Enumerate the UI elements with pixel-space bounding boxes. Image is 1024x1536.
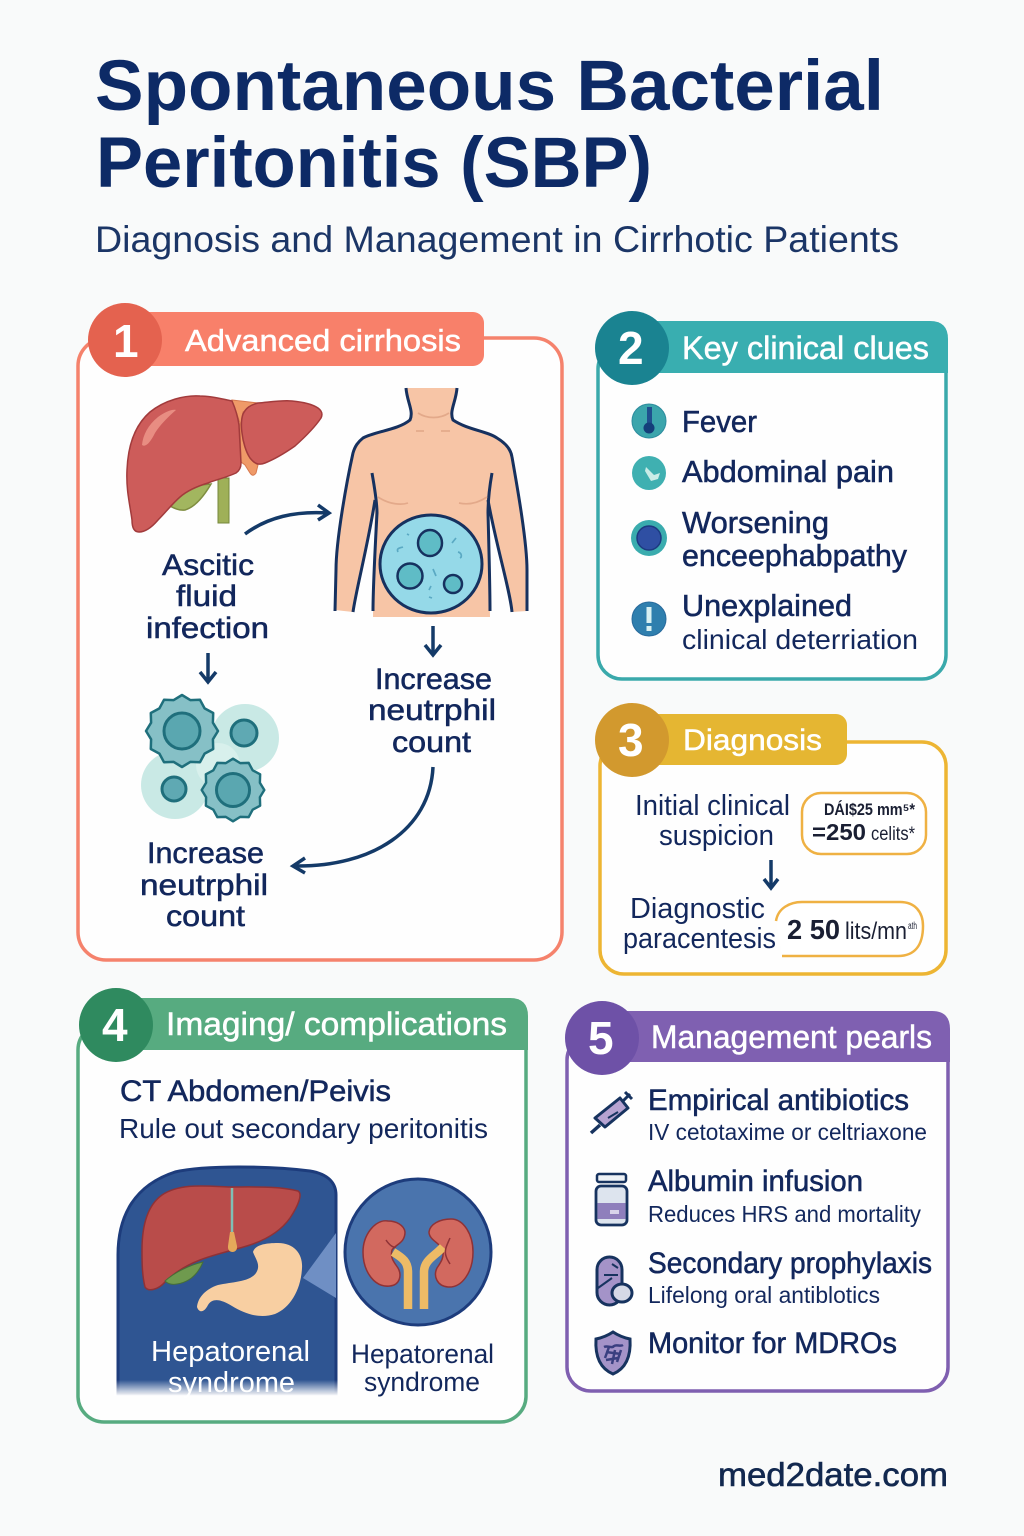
callout: threshold values: celits* — [871, 824, 916, 845]
panel 1: advanced cirrhosis — [78, 303, 562, 960]
label: ascitic fluid infection — [146, 549, 269, 645]
text: CT abdomen — [119, 1075, 488, 1144]
item: monitor for MDROs — [596, 1327, 897, 1374]
illustration: CT scan of abdomen: Hepatorenal — [151, 1336, 310, 1368]
icon: torso with infected ascites — [335, 388, 527, 617]
number badge 3 — [595, 703, 669, 777]
panel 4: imaging and complications — [78, 988, 528, 1422]
callout: threshold values: =250 — [812, 819, 866, 845]
item: empirical antibiotics: Empirical antibiotics — [648, 1084, 909, 1117]
label: increase neutrophil count, left: Increase — [147, 837, 264, 870]
label: increase neutrophil count, right: neutrphil — [368, 694, 496, 727]
text: CT abdomen: Rule out secondary peritonitis — [119, 1113, 488, 1144]
item: fever — [632, 404, 757, 439]
callout: threshold values: DÁI$25 mm⁵* — [824, 800, 915, 819]
item: unexplained deterioration: clinical deterriation — [682, 624, 918, 655]
item: albumin infusion: Albumin infusion — [648, 1165, 863, 1198]
arrow: to paracentesis — [764, 860, 778, 888]
label: increase neutrophil count, left: neutrphil — [140, 869, 268, 902]
item: monitor for MDROs: Monitor for MDROs — [648, 1327, 897, 1360]
header bar 1 — [130, 312, 484, 366]
number badge 5 — [565, 1001, 639, 1075]
arrow: curved return — [293, 767, 433, 873]
panel 5: management pearls — [565, 1001, 950, 1391]
number badge 1 — [88, 303, 162, 377]
illustration: CT scan of abdomen: syndrome — [168, 1367, 295, 1399]
arrow: down to neutrophils — [200, 653, 216, 682]
callout: fluid result — [776, 902, 923, 956]
header text 4: Imaging/ complications — [166, 1006, 507, 1042]
header text 3: Diagnosis — [683, 724, 822, 757]
label: ascitic fluid infection: infection — [146, 612, 269, 645]
callout: threshold values — [802, 793, 926, 854]
number badge 2: 2 — [618, 322, 644, 374]
label: increase neutrophil count, right: Increase — [375, 663, 492, 696]
label: ascitic fluid infection: fluid — [176, 580, 237, 613]
item: secondary prophylaxis: Secondary prophylaxis — [648, 1247, 932, 1280]
item: albumin infusion — [596, 1165, 921, 1227]
item: empirical antibiotics: IV cetotaxime or celtriaxone — [648, 1119, 927, 1145]
icon: liver — [127, 396, 322, 532]
item: unexplained deterioration — [632, 588, 918, 655]
illustration: kidneys — [345, 1179, 491, 1325]
title: Peritonitis (SBP) — [96, 124, 652, 203]
text: initial clinical suspicion: Initial clinical — [635, 790, 790, 822]
item: worsening encephalopathy: enceephabpathy — [682, 538, 907, 573]
header bar 5 — [590, 1011, 950, 1062]
number badge 1: 1 — [113, 315, 139, 367]
number badge 5: 5 — [588, 1012, 614, 1064]
text: diagnostic paracentesis — [623, 893, 776, 955]
number badge 2 — [595, 311, 669, 385]
arrow: abdomen down — [425, 626, 441, 655]
label: increase neutrophil count, left — [140, 837, 268, 933]
header text 5: Management pearls — [651, 1019, 932, 1055]
text: diagnostic paracentesis: paracentesis — [623, 923, 776, 955]
number badge 4 — [79, 988, 153, 1062]
text: initial clinical suspicion: suspicion — [659, 820, 774, 852]
item: unexplained deterioration: Unexplained — [682, 588, 852, 623]
item: albumin infusion: Reduces HRS and mortality — [648, 1201, 921, 1227]
icon: neutrophils — [141, 695, 279, 821]
item: fever: Fever — [682, 404, 757, 439]
subtitle: Diagnosis and Management in Cirrhotic Patients — [95, 219, 899, 260]
title — [95, 47, 884, 203]
number badge 4: 4 — [102, 999, 128, 1051]
number badge 3: 3 — [618, 714, 644, 766]
text: CT abdomen: CT Abdomen/Peivis — [120, 1075, 391, 1108]
item: abdominal pain: Abdominal pain — [682, 454, 894, 489]
label: hepatorenal syndrome: syndrome — [364, 1367, 480, 1397]
text: initial clinical suspicion — [635, 790, 790, 852]
label: increase neutrophil count, left: count — [166, 900, 246, 933]
callout: fluid result: 2 50 — [787, 914, 840, 945]
label: ascitic fluid infection: Ascitic — [162, 549, 254, 582]
label: increase neutrophil count, right — [368, 663, 496, 759]
header bar 4 — [100, 998, 528, 1050]
title: Spontaneous Bacterial — [95, 47, 884, 126]
illustration: CT scan of abdomen — [114, 1167, 340, 1399]
item: secondary prophylaxis: Lifelong oral antiblotics — [648, 1282, 880, 1308]
arrow: liver to abdomen — [245, 505, 329, 534]
header bar 2 — [620, 321, 948, 373]
panel 3: diagnosis — [595, 703, 946, 974]
item: empirical antibiotics — [591, 1084, 927, 1145]
label: hepatorenal syndrome — [351, 1339, 494, 1397]
label: increase neutrophil count, right: count — [392, 726, 472, 759]
header bar 3 — [620, 714, 847, 765]
header text 2: Key clinical clues — [682, 330, 929, 366]
footer: website: med2date.com — [718, 1456, 948, 1493]
item: secondary prophylaxis — [597, 1247, 932, 1308]
callout: fluid result: ath — [908, 921, 917, 932]
callout: fluid result: lits/mn — [845, 918, 907, 945]
item: worsening encephalopathy — [631, 505, 907, 573]
header text 1: Advanced cirrhosis — [185, 323, 461, 358]
item: worsening encephalopathy: Worsening — [682, 505, 829, 540]
panel 2: key clinical clues — [595, 311, 948, 679]
label: hepatorenal syndrome: Hepatorenal — [351, 1339, 494, 1369]
text: diagnostic paracentesis: Diagnostic — [630, 893, 765, 925]
